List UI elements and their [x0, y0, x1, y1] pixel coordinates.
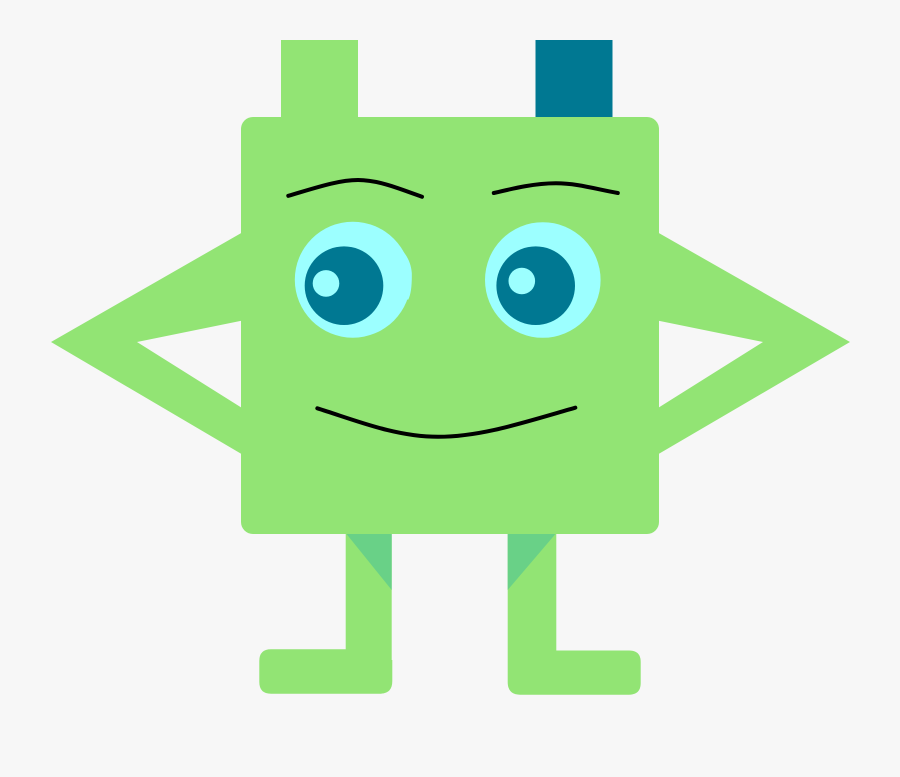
left leg shadow	[346, 533, 392, 590]
left eyebrow	[288, 180, 422, 197]
mouth	[317, 408, 575, 437]
right ear	[536, 40, 612, 130]
right arm	[650, 228, 850, 459]
right eyebrow	[494, 183, 618, 193]
left arm	[51, 228, 250, 459]
left leg and foot	[259, 520, 392, 694]
right eye	[485, 222, 601, 338]
left ear	[281, 40, 358, 130]
right leg and foot	[508, 520, 641, 695]
left eye	[295, 222, 412, 338]
right leg shadow	[508, 533, 556, 590]
body	[241, 117, 659, 534]
